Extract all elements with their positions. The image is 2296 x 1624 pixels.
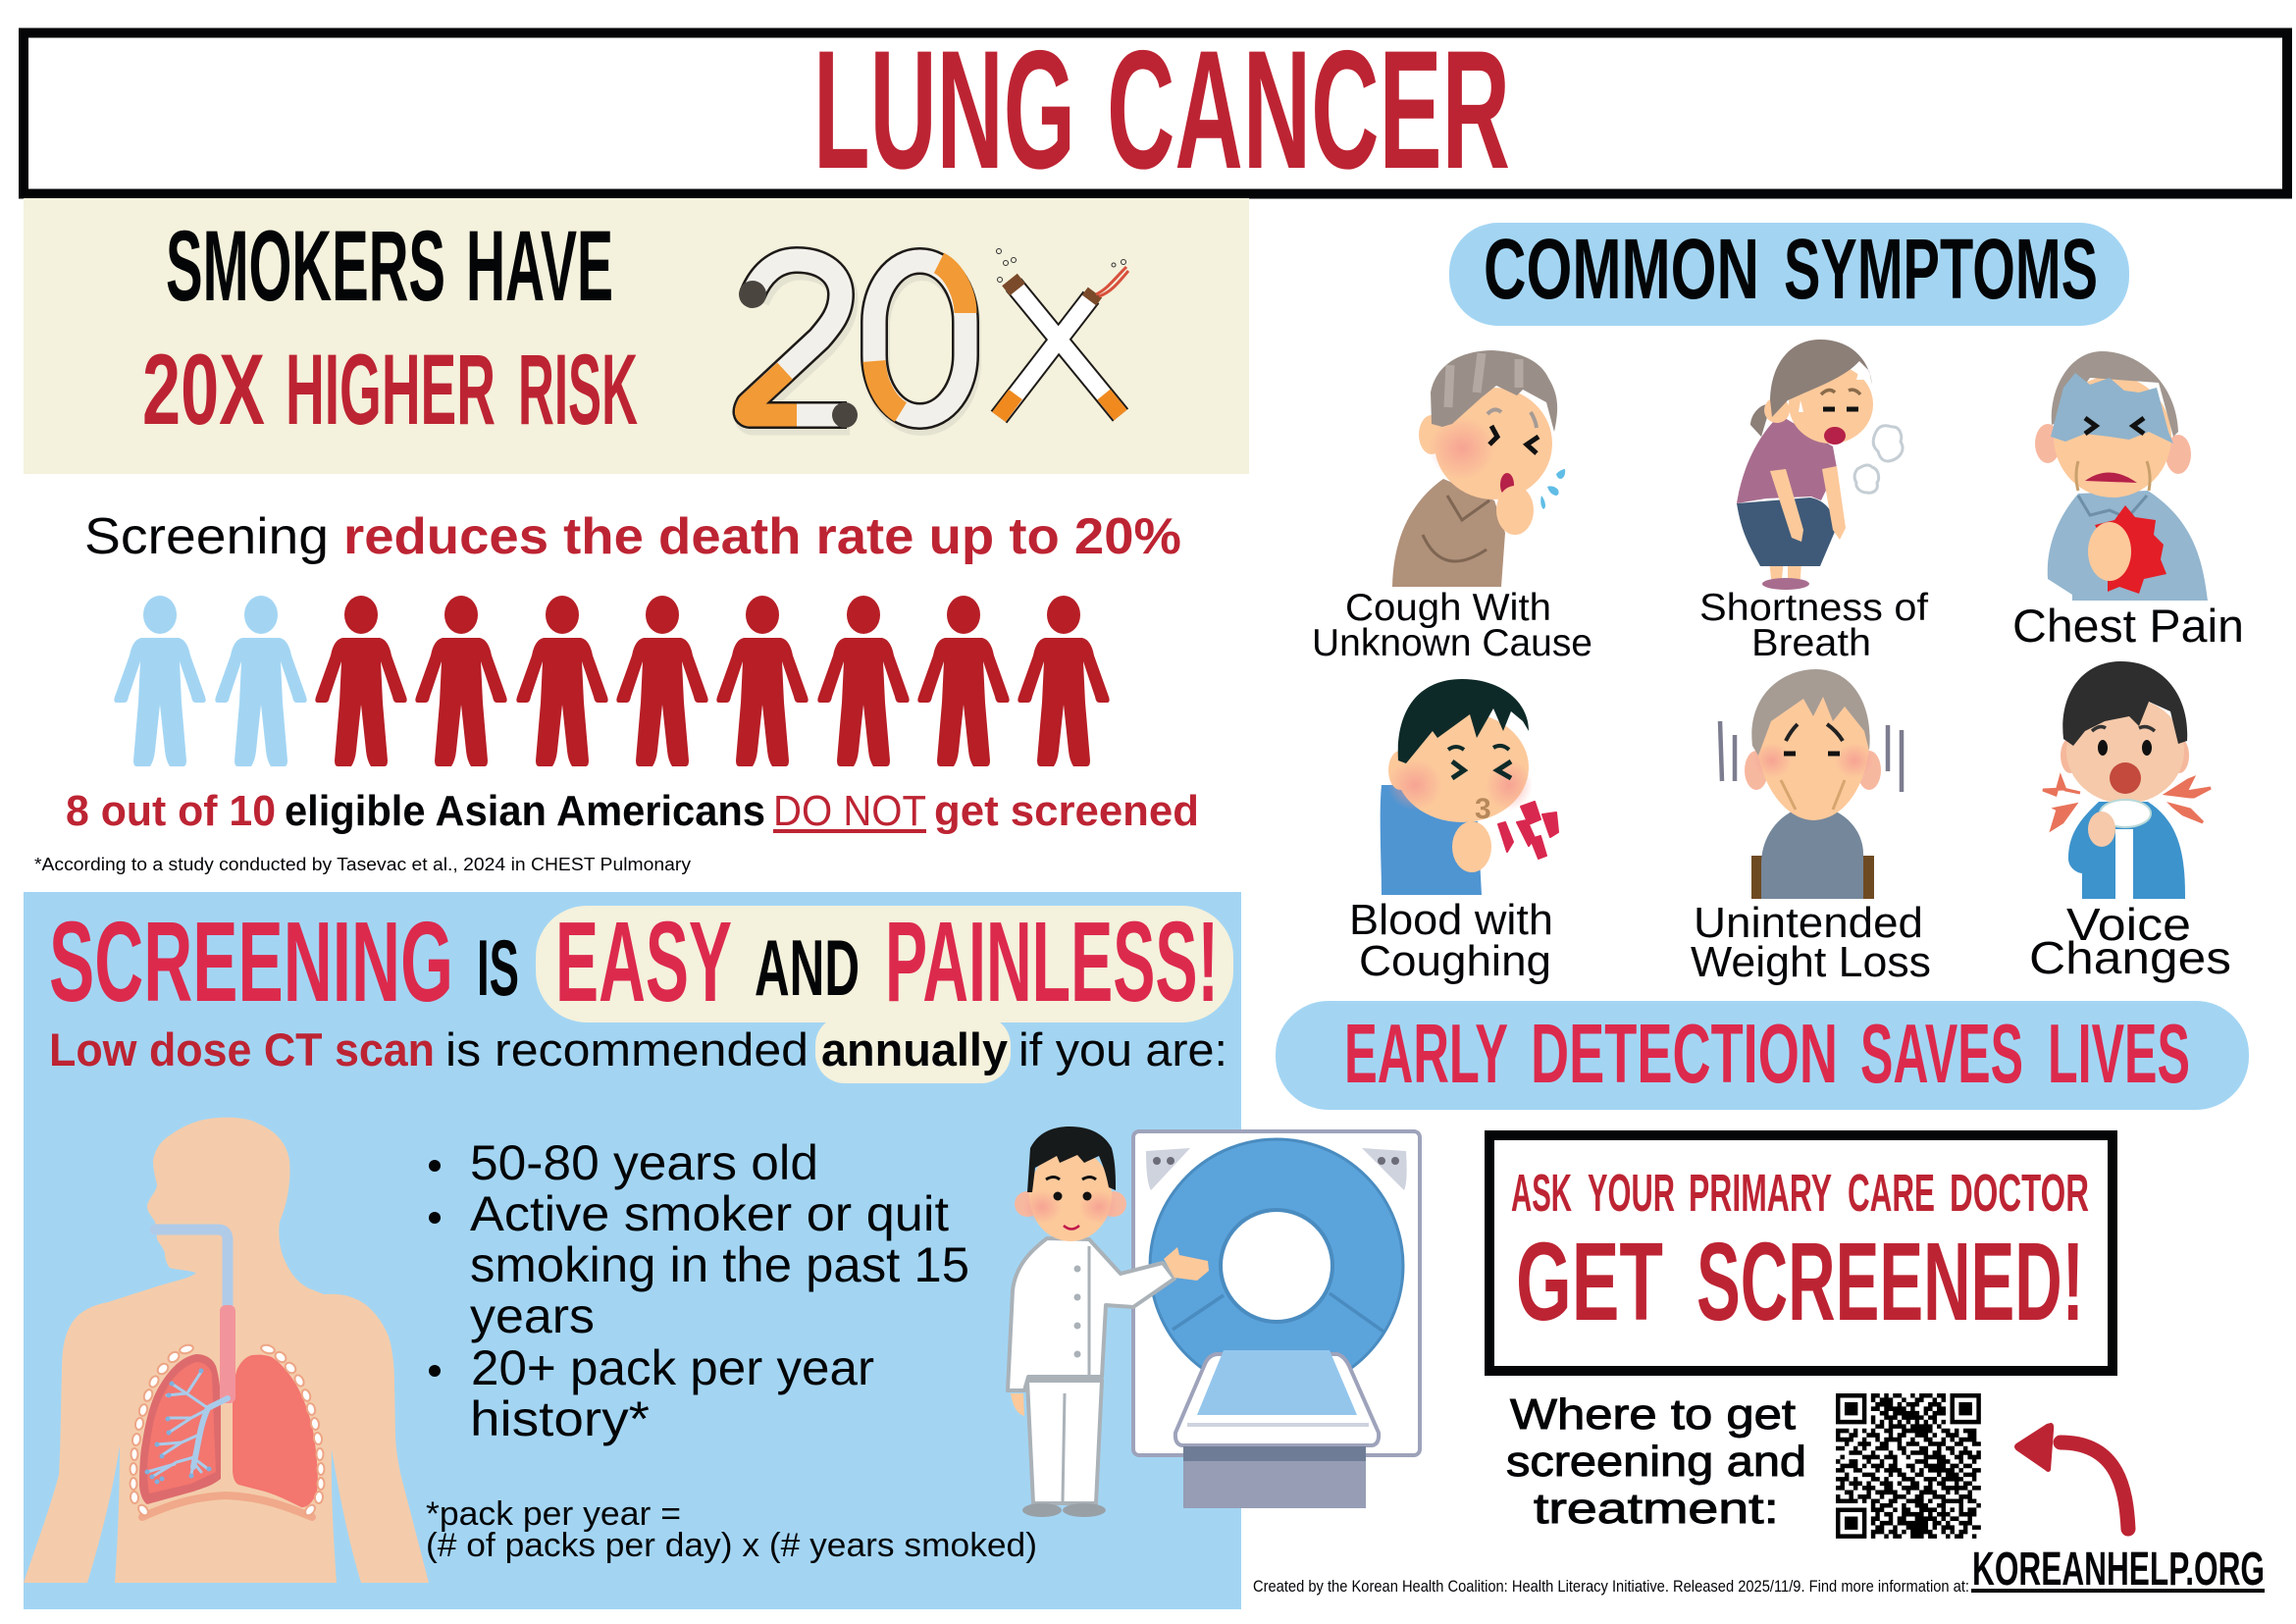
heading pill: common symptoms: COMMON bbox=[1484, 222, 1759, 317]
label: shortness of breath: Breath bbox=[1751, 622, 1871, 664]
heading: screening is easy and painless: EASY bbox=[555, 898, 732, 1025]
doctor coat bbox=[1008, 1238, 1174, 1390]
heading pill: common symptoms: SYMPTOMS bbox=[1784, 222, 2098, 317]
panel: smokers risk bbox=[24, 198, 1249, 474]
text: where to get screening: screening and bbox=[1506, 1438, 1806, 1486]
diaphragm bbox=[142, 1495, 312, 1517]
pack per year footnote bbox=[426, 1495, 1037, 1564]
heading: screening is easy and painless bbox=[49, 898, 1219, 1025]
heading: 20x higher risk: HIGHER bbox=[286, 334, 496, 445]
pack per year footnote: (# of packs per day) x (# years smoked) bbox=[426, 1527, 1037, 1564]
label: voice changes bbox=[2029, 899, 2231, 983]
icon: weight loss man bbox=[1720, 669, 1902, 899]
heading: screening is easy and painless: AND bbox=[755, 924, 860, 1013]
recommendation line bbox=[49, 1023, 1227, 1075]
eligibility bullets: 50-80 years old bbox=[470, 1135, 818, 1190]
title banner bbox=[24, 16, 2287, 204]
screening headline: Screening bbox=[84, 508, 329, 565]
eligibility bullets bbox=[429, 1135, 969, 1446]
banner pill: early detection saves lives: DETECTION bbox=[1531, 1008, 1838, 1101]
icon: coughing blood boy: 3 bbox=[1475, 793, 1491, 825]
heading pill: common symptoms bbox=[1449, 222, 2129, 326]
callout: ask your doctor: ASK bbox=[1511, 1164, 1572, 1223]
pill: annually bbox=[815, 1016, 1011, 1083]
illustration: torso with lungs bbox=[24, 1118, 429, 1583]
red people bbox=[315, 596, 1110, 766]
label: voice changes: Changes bbox=[2029, 932, 2231, 983]
title banner: LUNG bbox=[813, 16, 1075, 204]
bronchi bbox=[147, 1372, 228, 1477]
recommendation line: if you are: bbox=[1018, 1023, 1227, 1075]
text: where to get screening: treatment: bbox=[1534, 1485, 1779, 1533]
callout: ask your doctor: CARE bbox=[1848, 1164, 1935, 1223]
icon: chest pain man bbox=[2035, 351, 2208, 601]
label: shortness of breath bbox=[1699, 587, 1928, 664]
callout: ask your doctor: PRIMARY bbox=[1689, 1164, 1832, 1223]
illustration: CT scanner bbox=[1133, 1131, 1420, 1508]
statistic line: DO NOT bbox=[773, 787, 926, 835]
heading: smokers have: HAVE bbox=[466, 210, 613, 322]
label: unintended weight loss: Weight Loss bbox=[1691, 938, 1931, 986]
statistic line: 8 out of 10 bbox=[66, 787, 276, 835]
scanner ring bbox=[1185, 1175, 1368, 1357]
heading: screening is easy and painless: SCREENING bbox=[49, 898, 453, 1025]
ribs bbox=[130, 1343, 324, 1517]
scanner table bbox=[1175, 1354, 1379, 1445]
pill: easy and painless bbox=[536, 906, 1233, 1022]
statistic line bbox=[66, 787, 1199, 835]
left lung bbox=[139, 1354, 221, 1504]
label: blood with coughing: Coughing bbox=[1359, 937, 1551, 985]
label: blood with coughing bbox=[1349, 896, 1553, 985]
illustration: doctor bbox=[1008, 1126, 1209, 1517]
label: chest pain: Chest Pain bbox=[2012, 600, 2244, 652]
banner pill: early detection saves lives: EARLY bbox=[1344, 1008, 1508, 1101]
banner pill: early detection saves lives: LIVES bbox=[2048, 1008, 2190, 1101]
callout: ask your doctor bbox=[1489, 1135, 2113, 1371]
icon: hoarse voice boy bbox=[2043, 661, 2211, 899]
study footnote: *According to a study conducted by Tasevac et al., 2024 in CHEST Pulmonary bbox=[34, 855, 691, 874]
pictogram: 2 of 10 people bbox=[114, 596, 1110, 766]
label: blood with coughing: Blood with bbox=[1349, 896, 1553, 944]
title banner: CANCER bbox=[1107, 16, 1510, 204]
callout: ask your doctor: GET bbox=[1516, 1220, 1663, 1343]
right lung bbox=[233, 1355, 318, 1507]
callout: ask your doctor: DOCTOR bbox=[1950, 1164, 2089, 1223]
blue people bbox=[114, 596, 307, 766]
pack per year footnote: *pack per year = bbox=[426, 1495, 681, 1533]
statistic line: get screened bbox=[934, 787, 1199, 835]
label: voice changes: Voice bbox=[2066, 899, 2191, 950]
label: cough with unknown cause bbox=[1312, 587, 1592, 664]
callout: ask your doctor: YOUR bbox=[1588, 1164, 1675, 1223]
label: unintended weight loss: Unintended bbox=[1694, 899, 1923, 947]
doctor head bbox=[1015, 1191, 1040, 1217]
recommendation line: Low dose CT scan bbox=[49, 1023, 435, 1075]
credit line: Created by the Korean Health Coalition: Health Literacy Initiative. Released 2025/11/9. Find more information at: bbox=[1253, 1577, 1969, 1596]
label: shortness of breath: Shortness of bbox=[1699, 587, 1928, 629]
recommendation line: annually bbox=[821, 1023, 1008, 1075]
qr code bbox=[1836, 1393, 1981, 1539]
screening headline: reduces the death rate up to 20% bbox=[343, 508, 1181, 565]
heading: 20x higher risk: RISK bbox=[518, 334, 638, 445]
heading: 20x higher risk: 20X bbox=[142, 334, 265, 445]
heading: screening is easy and painless: IS bbox=[477, 924, 519, 1013]
eligibility bullets: Active smoker or quit bbox=[470, 1186, 949, 1241]
icon: coughing man bbox=[1392, 350, 1565, 587]
heading: 20x higher risk bbox=[142, 334, 638, 445]
arrow: points to qr code bbox=[2014, 1423, 2128, 1529]
icon: breathless woman bbox=[1737, 340, 1903, 590]
label: cough with unknown cause: Unknown Cause bbox=[1312, 622, 1592, 664]
eligibility bullets: history* bbox=[470, 1391, 650, 1446]
eligibility bullets: years bbox=[470, 1288, 595, 1343]
trachea bbox=[220, 1305, 235, 1403]
breath clouds bbox=[1854, 426, 1903, 493]
recommendation line: is recommended bbox=[445, 1023, 809, 1075]
heading: screening is easy and painless: PAINLESS! bbox=[885, 898, 1219, 1025]
banner pill: early detection saves lives bbox=[1276, 1001, 2249, 1110]
label: cough with unknown cause: Cough With bbox=[1345, 587, 1551, 629]
icon: coughing blood boy bbox=[1381, 679, 1558, 895]
doctor hands bbox=[1164, 1247, 1209, 1281]
statistic line: eligible Asian Americans bbox=[285, 787, 765, 835]
eligibility bullets: smoking in the past 15 bbox=[470, 1237, 969, 1292]
text: where to get screening: Where to get bbox=[1510, 1390, 1796, 1439]
text: where to get screening bbox=[1506, 1390, 1806, 1533]
heading: smokers have: SMOKERS bbox=[166, 210, 445, 322]
doctor pants bbox=[1027, 1381, 1102, 1503]
icon: 20x made of cigarettes bbox=[739, 249, 1128, 428]
label: unintended weight loss bbox=[1691, 899, 1931, 986]
banner pill: early detection saves lives: SAVES bbox=[1860, 1008, 2023, 1101]
eligibility bullets: 20+ pack per year bbox=[471, 1340, 874, 1395]
panel: easy and painless screening bbox=[24, 892, 1241, 1609]
